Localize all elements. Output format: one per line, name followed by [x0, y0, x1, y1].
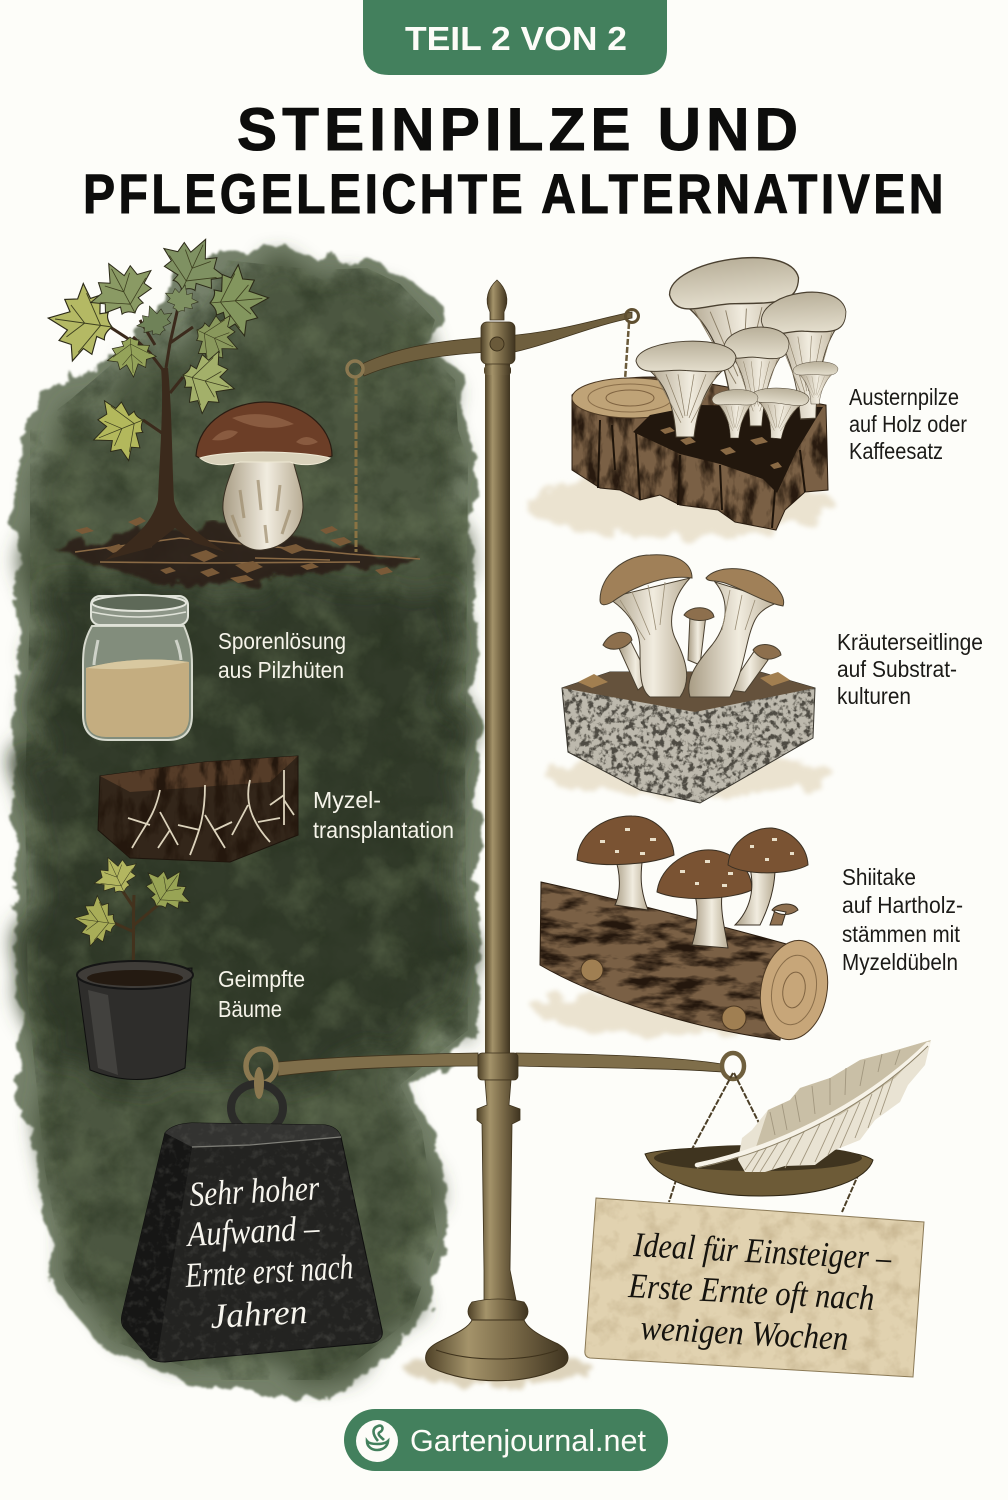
chain right	[625, 323, 629, 380]
label: shiitake: stämmen mit	[842, 921, 961, 947]
text on weight: Aufwand –	[185, 1208, 321, 1254]
label: oyster mushrooms: Austernpilze	[849, 384, 959, 410]
illustration: scale pan with feather	[645, 1040, 931, 1212]
label: mycelium transplant: transplantation	[313, 817, 454, 843]
sign text: Ideal für Einsteiger –	[632, 1225, 893, 1278]
footer badge: Gartenjournal.net: Gartenjournal.net	[410, 1423, 646, 1458]
label: king oyster mushrooms: auf Substrat-	[837, 656, 957, 682]
label: inoculated trees: Bäume	[218, 996, 282, 1022]
text on weight	[184, 1168, 354, 1336]
sign: beginner note	[584, 1197, 925, 1378]
label: spore solution: Sporenlösung	[218, 628, 346, 654]
label: inoculated trees: Geimpfte	[218, 966, 305, 992]
sign text: wenigen Wochen	[640, 1308, 849, 1358]
upper beam	[360, 312, 632, 376]
oyster caps	[636, 253, 851, 441]
label: mycelium transplant: Myzel-	[313, 787, 381, 813]
illustration: porcini mushroom	[196, 402, 332, 550]
label: oyster mushrooms: auf Holz oder	[849, 411, 967, 437]
label: oyster mushrooms: Kaffeesatz	[849, 438, 943, 464]
text on weight: Sehr hoher	[188, 1168, 321, 1214]
text on weight: Ernte erst nach	[184, 1247, 354, 1295]
text on weight: Jahren	[209, 1292, 308, 1336]
top badge: part 2 of 2: TEIL 2 VON 2	[405, 20, 627, 57]
title	[83, 96, 947, 225]
illustration: shiitake on hardwood log	[535, 816, 835, 1045]
illustration: king oyster mushrooms on substrate	[545, 555, 835, 805]
icon: logo circle	[356, 1420, 398, 1462]
illustration: oyster mushrooms on stump	[525, 253, 851, 537]
icon: mycelium soil block	[98, 756, 298, 862]
label: shiitake: auf Hartholz-	[842, 892, 963, 918]
icon: potted tree	[71, 848, 201, 1080]
title: STEINPILZE UND	[237, 96, 798, 163]
watercolor forest background panel	[13, 242, 485, 1400]
illustration: young tree	[43, 225, 272, 560]
column	[485, 360, 510, 1060]
icon: glass jar with spore solution	[83, 595, 192, 740]
lower column	[477, 1080, 520, 1300]
illustration: soil and leaf litter	[55, 517, 425, 584]
lower beam	[278, 1053, 722, 1076]
label: shiitake: Myzeldübeln	[842, 949, 958, 975]
chain left	[354, 378, 358, 552]
label: king oyster mushrooms: kulturen	[837, 683, 911, 709]
label: spore solution: aus Pilzhüten	[218, 657, 344, 683]
illustration: iron weight with text	[122, 1067, 384, 1364]
top badge: part 2 of 2	[363, 0, 667, 75]
label: king oyster mushrooms: Kräuterseitlinge	[837, 629, 983, 655]
footer badge: Gartenjournal.net	[344, 1409, 668, 1471]
label: shiitake: Shiitake	[842, 864, 916, 890]
sign text	[627, 1225, 893, 1358]
sign text: Erste Ernte oft nach	[627, 1266, 875, 1318]
illustration: brass balance scale	[246, 280, 744, 1384]
